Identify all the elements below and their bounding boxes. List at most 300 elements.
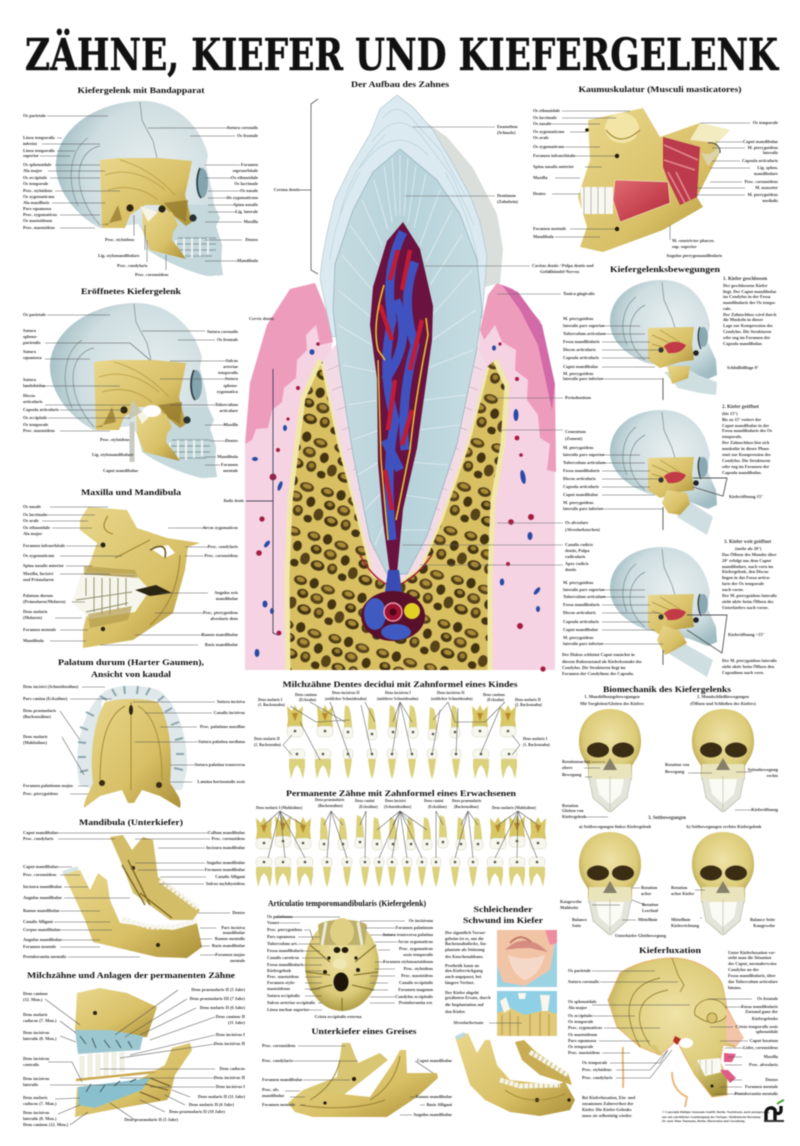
labels: Fossa mandibularis: [267, 962, 304, 967]
labels: [23, 113, 259, 277]
labels: Dens incisivus I: [385, 691, 411, 695]
illustration: face: [497, 930, 557, 987]
labels: Angulus mandibulae: [23, 937, 62, 942]
labels: Os sphenoidale: [23, 162, 51, 167]
labels: Unterkiefer Gleitbewegung: [615, 933, 667, 938]
labels: Spina nasalis: [233, 202, 258, 207]
tooth labels: Canalis radicis: [565, 542, 593, 547]
text: bottom note: muss sie selbsttätig wieder.: [582, 1113, 632, 1118]
heading: Eröffnetes Kiefergelenk: [81, 286, 181, 296]
labels: Mandibula: [23, 638, 45, 643]
labels: Balance Seite: [750, 917, 775, 922]
labels: Lig. stylomandibulare: [98, 253, 139, 258]
labels: (Eckzähne): [428, 805, 448, 809]
heading: [463, 904, 543, 925]
heading: Kiefergelenksbewegungen: [610, 264, 720, 274]
leader lines: [42, 507, 208, 645]
labels: Maxilla: [533, 175, 548, 180]
labels: Proc. coronoideus: [204, 553, 238, 558]
labels: Proc. condylaris: [117, 263, 148, 268]
labels: Rotation: [641, 885, 658, 890]
text: legal: © Copyright Rüdiger Anatomie GmbH, Berlin. Nachdruck, auch auszugsweise,: [662, 1109, 770, 1114]
labels: Mandibula: [217, 454, 239, 459]
labels: 3. Seitbewegungen: [648, 816, 686, 821]
text: 2. Kiefer geöffnet: Bis zu 15° rotiert der: [722, 417, 761, 422]
tooth labels: dentis, Pulpa: [565, 548, 590, 553]
labels: spheno-: [223, 383, 239, 388]
leader lines: [275, 917, 405, 1010]
labels: Dens caninus (12. Mon.): [23, 1122, 69, 1127]
labels of skull 2: [563, 445, 763, 511]
labels: Dens molaris: [23, 734, 48, 739]
labels of skull 1: Fossa mandibularis: [563, 339, 600, 344]
labels: Foramen: [241, 162, 259, 167]
labels: Basis Alligani: [426, 1102, 453, 1107]
labels: Caput mandibulae: [23, 864, 58, 869]
labels of skull 1: [563, 316, 759, 381]
text: lower-left note: diesem Ruhezustand als Kieferkontakt des: [562, 659, 642, 664]
heading: Unterkiefer eines Greises: [312, 1026, 417, 1036]
panel: Kaumuskulatur: [533, 84, 778, 258]
labels: Proc. pterygoideus: [23, 791, 58, 796]
labels: Os temporale: [23, 422, 48, 427]
text: 1. Kiefer geschlossen: [723, 277, 777, 346]
text: 1. Kiefer geschlossen: Lage zur Kompression des: [723, 323, 773, 328]
labels: Sutura: [23, 328, 37, 333]
labels: Sutura occipitalis: [267, 993, 300, 998]
labels: (11 Jahr): [228, 1020, 246, 1025]
labels: alveolaris dens: [210, 616, 238, 621]
labels of skull 1: Capsula articularis: [563, 355, 599, 360]
panel: Milchzähne Dentes decidui: [254, 679, 551, 779]
labels: caducus (7. Mon.): [23, 1018, 57, 1023]
labels: Crista temporalis ossis: [736, 1024, 778, 1029]
body text: gezähnten Ersatz, durch: [445, 995, 491, 1000]
labels: Seite: [572, 923, 581, 928]
labels: Os lacrimale: [234, 181, 258, 186]
labels: Kiefergelenk: [562, 814, 587, 819]
labels: [23, 312, 239, 473]
labels: Canalis caroticus: [267, 955, 300, 960]
labels: [23, 684, 246, 796]
panel: Kiefergelenksbewegungen: [562, 264, 777, 677]
text: bottom note: [582, 1095, 636, 1118]
leader lines: [550, 111, 750, 240]
text: legal: Dr. med. Hans Neumann, Berlin. Illustration und Gestaltung.: [662, 1119, 746, 1123]
labels: Kiefergelenk: [267, 968, 292, 973]
text: 3. Kiefer weit geöffnet: mandibulare, nach vorn im: [722, 564, 773, 569]
near side of senile mandible: [288, 1050, 438, 1117]
tooth labels: [224, 124, 600, 572]
text: 2. Kiefer geöffnet: sehr eng im Foramen der: [722, 464, 769, 469]
tooth labels: Cervix dentis: [249, 316, 274, 321]
body text: plantate als Stützung: [445, 947, 485, 952]
labels: Foramen stylo-: [267, 980, 296, 985]
first-skull vertical line: [662, 378, 664, 400]
labels: Proc. mastoideus: [568, 1050, 600, 1055]
tooth labels: Dentinum: [497, 193, 516, 198]
text: 1. Kiefer geschlossen: liegt. Der Caput mandibulae: [723, 289, 776, 294]
details: [580, 113, 730, 231]
mandible near side: [63, 870, 202, 958]
text: 1. Kiefer geschlossen: 1. Kiefer geschlossen: [723, 277, 767, 282]
labels: [533, 108, 778, 258]
labels of skull 3: Tuberculum articulare: [563, 594, 606, 599]
labels: Angulus mandibulae: [413, 1112, 452, 1117]
far side of senile mandible: [303, 1043, 388, 1103]
dentin: [333, 149, 482, 574]
labels: rechts: [767, 773, 778, 778]
text: right intro: Condylus an der: [728, 967, 759, 972]
labels: Protuberantia mentalis: [735, 1091, 778, 1096]
jaw bones: [72, 507, 200, 648]
labels: Proc. coronoideus: [744, 179, 778, 184]
labels: Mittellinie: [638, 917, 658, 922]
labels: mastoideum: [267, 986, 290, 991]
labels: Mahlseite: [560, 905, 578, 910]
labels: a) Seitbewegungen linkes Kiefergelenk: [579, 824, 652, 829]
labels: Dentes: [232, 910, 245, 915]
labels: M. pterygoideus: [748, 145, 778, 150]
labels of skull 2: lateralis pars superior: [563, 452, 605, 457]
heading: [58, 657, 204, 679]
upper permanent teeth: [256, 815, 546, 850]
skull D: [692, 832, 754, 935]
labels: Proc. mastoideus: [401, 973, 433, 978]
labels: Kaugewebe: [753, 923, 775, 928]
milk teeth: [76, 1011, 170, 1100]
text: right intro: Fossa mandibularis, über: [728, 973, 776, 978]
tooth labels: dentis: [565, 567, 577, 572]
labels: Maxilla, Incisivi: [23, 571, 54, 576]
labels: Spina nasalis anterior: [533, 164, 574, 169]
labels: Sutura transversa palatina: [383, 932, 434, 937]
labels: Linea temporalis: [23, 135, 55, 140]
tooth labels: (Zahnbein): [497, 199, 519, 204]
labels: Os frontale: [237, 133, 258, 138]
labels: Proc. pterygoideus: [267, 927, 302, 932]
labels: Fossa mandibularis: [267, 948, 304, 953]
labels: (1. Backenzahn): [258, 703, 286, 707]
lower milk teeth: [289, 749, 517, 779]
labels: Mandibula: [533, 234, 555, 239]
labels: Os nasale: [240, 188, 258, 193]
tooth labels: Radix dentis: [224, 499, 245, 503]
heading: Kaumuskulatur (Musculi masticatores): [578, 84, 742, 94]
opened skull: [50, 303, 217, 478]
labels: Dens molaris II (6 Jahr): [200, 1005, 246, 1010]
enamel: [320, 95, 487, 337]
labels: mandibulae: [216, 596, 238, 601]
labels: Os occipitale: [23, 415, 47, 420]
labels: (Backenzähne): [23, 714, 51, 719]
labels: Dens praemolaris II (5 Jahr): [191, 987, 246, 992]
leader lines: [40, 116, 242, 270]
labels: Proc. palatinus maxillae: [200, 724, 245, 729]
labels: Proc. styloideus: [582, 1067, 612, 1072]
labels of skull 1: Schlußbißlage 0°: [727, 365, 759, 370]
labels: Dentes: [533, 191, 546, 196]
skull with ligaments: [56, 101, 223, 276]
text: 1. Kiefer geschlossen: die Muskeln in dieser: [723, 317, 763, 322]
text: 2. Kiefer geöffnet: temporale.: [722, 434, 742, 439]
labels: Incisura mandibulae: [206, 845, 245, 850]
labels: Dens incisivus: [23, 1110, 50, 1115]
labels: Caput mandibulae: [103, 468, 138, 473]
labels: Os occipitale: [23, 175, 47, 180]
lower tooth germs: [78, 1078, 150, 1108]
labels: Kaugewebe: [560, 899, 582, 904]
labels: Os zygomaticum: [533, 144, 565, 149]
panel: Kiefergelenk mit Bandapparat: [23, 85, 259, 277]
labels: (Öffnen und Schließen des Kiefers): [690, 701, 756, 706]
labels: Dentes: [225, 438, 238, 443]
illustration: teeth and bone: [497, 991, 557, 1036]
labels of skull 2: M. pterygoideus: [563, 500, 594, 505]
labels: Ramus mandibulae: [202, 632, 238, 637]
panel: Milchzähne und Anlagen: [23, 970, 246, 1127]
text: 1. Kiefer geschlossen: Der Zahnschluss wird durch: [723, 312, 777, 317]
tooth labels: Tunica gingivalis: [563, 291, 595, 296]
tooth labels: (Alveolarknochen): [565, 527, 600, 532]
labels: Crista occipitalis externa: [315, 1014, 362, 1019]
labels: Foramen: [221, 462, 239, 467]
labels: Os occipitale: [568, 1013, 592, 1018]
body text: den Kiefer.: [445, 1009, 466, 1014]
body text: auch angepasst, bei: [445, 974, 482, 979]
labels: spheno-: [23, 334, 38, 339]
heading: Ansicht von kaudal: [91, 669, 172, 679]
text: right intro: steht man die Situation: [728, 955, 772, 960]
heading: Kiefergelenk mit Bandapparat: [78, 85, 205, 95]
labels: Dens molaris II (11 Jahr): [198, 1094, 246, 1099]
teeth and details: [63, 860, 198, 947]
skull 1 closed: [610, 280, 717, 395]
skull 2 opened: [610, 410, 727, 535]
text: 2. Kiefer geöffnet: [722, 405, 772, 475]
labels: Maxilla: [764, 1054, 779, 1059]
labels: Proc. mastoideus: [23, 225, 55, 230]
labels: Dens incisivus II: [332, 691, 360, 695]
labels: und Prämolaren: [23, 577, 54, 582]
luxated skull: [608, 958, 743, 1097]
heading: Articulatio temporomandibularis (Kiefergelenk): [268, 898, 426, 908]
labels: Proc. condylaris: [582, 1075, 613, 1080]
labels: lateralis (8. Mon.): [23, 1116, 57, 1121]
labels of skull 3: Kieferöffnung >15°: [728, 632, 765, 637]
lower permanent teeth: [256, 857, 545, 887]
skull A: [579, 709, 641, 812]
text: 3. Kiefer weit geöffnet: nach vorne.: [722, 587, 744, 592]
labels: Rotation: [562, 803, 579, 808]
labels: Mit Vorgleiten/Gleiten des Kiefers: [580, 701, 644, 706]
masseter: [613, 180, 670, 222]
labels: Vomer: [267, 920, 280, 925]
labels: (Eckzahn): [487, 698, 505, 702]
labels: Foramen magnum: [398, 987, 433, 992]
text: 1. Kiefer geschlossen: im Condylus in der Fossa: [723, 294, 771, 299]
labels: Dens incisivus I: [216, 1084, 245, 1089]
labels of skull 1: M. pterygoideus: [563, 371, 594, 376]
mandibular canal: [361, 591, 425, 641]
heading: Der Aufbau des Zahnes: [351, 80, 449, 89]
labels: Rotation: [642, 902, 659, 907]
labels: Dens molaris I (Mahlzähne): [256, 806, 303, 810]
skull base: [305, 918, 379, 1011]
body text: die Implantation auf: [445, 1002, 484, 1007]
leader lines: [592, 971, 752, 1094]
upper tooth germs: [75, 1030, 143, 1054]
labels: Dens praemolaris II (10 Jahr): [169, 1109, 226, 1114]
labels: Seitenbewegung: [748, 767, 779, 772]
labels: Proc. styloideus: [23, 188, 53, 193]
body text: Alveolarfortsatz: [453, 1020, 484, 1025]
labels: (1. Backenzahn): [523, 743, 551, 747]
labels: Os palatinum: [267, 914, 293, 919]
labels: Proc. coronoideus: [262, 1043, 296, 1048]
labels: (12. Mon.): [23, 997, 43, 1002]
labels: Maxilla: [224, 422, 239, 427]
skull 3 wide open: [610, 547, 727, 677]
text: right intro: hinaus.: [728, 985, 742, 990]
labels: [267, 914, 434, 1019]
labels: Capsula articularis: [23, 407, 59, 412]
labels: (seitlicher Schneidezahn): [431, 697, 473, 701]
bracket: corona: [300, 99, 318, 274]
labels: Proc. zygomaticus: [568, 1025, 602, 1030]
labels: lateralis: [763, 150, 778, 155]
labels: Proc. mastoideus: [267, 974, 299, 979]
logo: [764, 1100, 784, 1122]
text: 2. Kiefer geöffnet: Der Zahnschluss löst sich: [722, 440, 770, 445]
tooth labels: Gefäßbündel-Nervus: [540, 269, 580, 274]
labels: Os temporale: [582, 1060, 607, 1065]
tooth labels: Enamelum: [497, 124, 518, 129]
panel: Der Aufbau des Zahnes: [224, 80, 600, 672]
labels: lateralis: [23, 1082, 38, 1087]
labels: Linea nuchae superior: [267, 1007, 309, 1012]
text: 3. Kiefer weit geöffnet: (mehr als 20°): [735, 546, 762, 551]
leader lines: [60, 687, 215, 794]
labels of skull 3: M. pterygoideus: [563, 635, 594, 640]
text: lower-left note: Der Diskus schleimt Caput zunächst in: [562, 652, 635, 657]
heading: Mandibula (Unterkiefer): [79, 817, 183, 827]
labels: Os mastoideum: [568, 1032, 597, 1037]
heading: Biomechanik des Kiefergelenks: [603, 684, 732, 694]
tooth labels: Cementum: [565, 429, 586, 434]
labels: Os mastoideum: [23, 218, 52, 223]
labels: Sutura: [225, 376, 239, 381]
muscle fibres: [664, 145, 698, 203]
labels: Ala major: [23, 168, 42, 173]
text: 2. Kiefer geöffnet: Condylus. Die Strukturen: [722, 458, 771, 463]
labels of skull 3: M. pterygoideus: [563, 580, 594, 585]
labels: Os ethmoidale: [23, 525, 50, 530]
labels of skull 3: [563, 580, 765, 646]
labels: Dens molaris: [23, 609, 48, 614]
labels: (Backenzähne): [454, 805, 479, 809]
labels: lambdoidea: [23, 383, 46, 388]
labels: Canalis Alligani: [215, 874, 246, 879]
labels: [23, 987, 246, 1127]
labels: mentale: [230, 958, 245, 963]
labels: Sutura palatina transversa: [195, 762, 246, 767]
labels: Caput mandibulae: [417, 1058, 452, 1063]
labels: Foramen mentale: [745, 1084, 778, 1089]
body text: des Knochenabbaus.: [445, 954, 484, 959]
panel: Schleichender Schwund: [445, 904, 575, 1116]
text: 1. Kiefer geschlossen: mandibularis der Os tempo-: [723, 300, 777, 305]
labels: Pars incisiva: [221, 925, 246, 930]
labels: Foramen mentale: [23, 944, 56, 949]
body text: den Kieferrückgang: [445, 968, 483, 973]
labels: Capsula articularis: [742, 158, 778, 163]
panel: Biomechanik des Kiefergelenks: [560, 684, 779, 938]
labels: Foramen mandibulae: [205, 867, 245, 872]
labels: obere: [562, 765, 572, 770]
labels of skull 1: M. pterygoideus: [563, 316, 594, 321]
labels: Bewegung: [562, 772, 582, 777]
bone: [287, 360, 507, 670]
text: bottom note: Bei Kieferluxation, Ein- und: [582, 1095, 636, 1100]
labels: Pars squamosa: [23, 206, 52, 211]
panel: Palatum durum: [23, 657, 246, 808]
labels of skull 2: Discus articularis: [563, 476, 596, 481]
labels: Os lacrimale: [23, 512, 47, 517]
labels: Mittellinie: [671, 917, 691, 922]
labels of skull 1: lateralis pars inferior: [563, 376, 603, 381]
gingiva blood vessels: [252, 342, 546, 672]
heading: Milchzähne Dentes decidui mit Zahnformel eines Kindes: [282, 679, 518, 689]
labels: Angulus mandibulae: [23, 895, 62, 900]
labels: arteriae: [223, 364, 238, 369]
tooth labels: Apex radicis: [565, 561, 589, 566]
labels: Kieferöffnung: [751, 807, 779, 812]
labels: Discus: [23, 393, 35, 398]
labels: lateralis (8. Mon.): [23, 1036, 57, 1041]
labels: Bewegung: [665, 769, 685, 774]
labels of skull 2: Caput mandibulae: [563, 492, 598, 497]
labels of skull 2: Capsula articularis: [563, 484, 599, 489]
labels: Proc. styloideus: [105, 237, 135, 242]
labels: Sutura coronalis: [227, 125, 258, 130]
tooth labels: (Schmelz): [497, 130, 516, 135]
labels: Dens molaris I: [258, 698, 283, 702]
labels: Dens molaris II (6 Jahr): [189, 1102, 235, 1107]
body text: [445, 930, 491, 1025]
text: legal: nur mit schriftlicher Genehmigung des Verlages. Medizinische Beratung:: [662, 1115, 761, 1119]
labels: Foramen infraorbitale: [23, 543, 65, 548]
labels: Sutura incisiva: [217, 699, 246, 704]
body text: Der Kiefer abgeht: [445, 990, 479, 995]
panel: Articulatio temporomandibularis: [267, 898, 434, 1019]
labels: Tuberculum art.: [267, 941, 298, 946]
labels: Proc. zygomaticus: [399, 946, 433, 951]
labels: Basis mandibulae: [205, 642, 238, 647]
labels: Dens molaris II: [254, 737, 280, 741]
text: 2. Kiefer geöffnet: Fossa mandibularis des Os: [722, 428, 772, 433]
labels: Balance: [572, 917, 587, 922]
heading: Palatum durum (Harter Gaumen),: [58, 657, 204, 667]
labels: (Mahlzähne): [23, 740, 47, 745]
labels: Collum mandibulae: [208, 830, 245, 835]
text: 3. Kiefer weit geöffnet: Das Öffnen des Mundes über: [722, 552, 777, 557]
labels: Os temporale: [23, 181, 48, 186]
body text: längere Verlust.: [445, 980, 474, 985]
labels: inferior: [23, 141, 37, 146]
text: 3. Kiefer weit geöffnet: zieht aktiv beim Öffnen des: [722, 599, 774, 604]
labels: Dens praemolaris II (5 Jahr): [124, 1117, 179, 1122]
